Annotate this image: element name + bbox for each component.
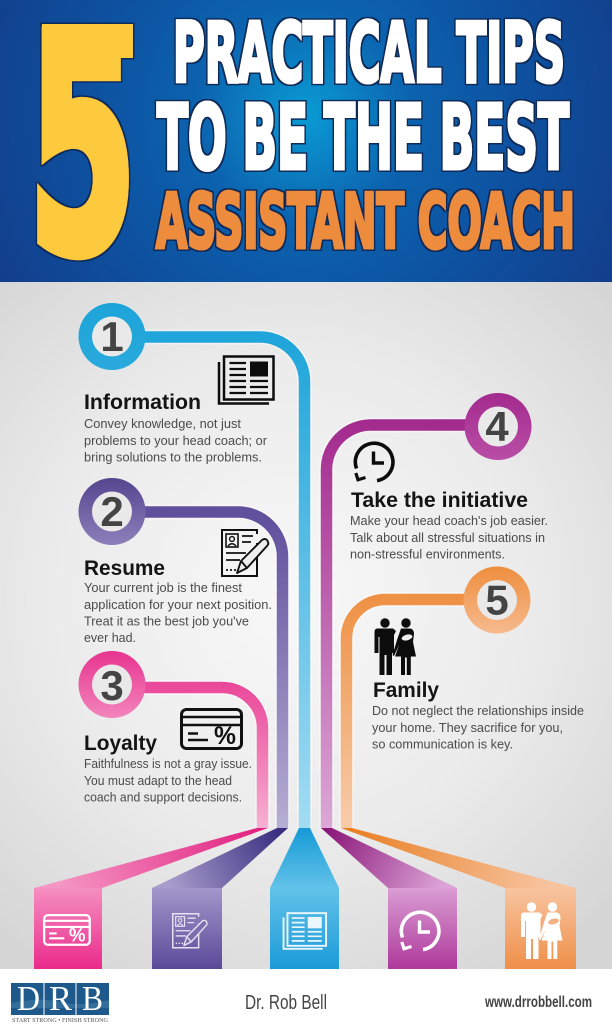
tile: newspaper icon <box>270 888 339 969</box>
panel: tip 1 information <box>78 303 304 828</box>
heading: family: Family <box>373 679 439 702</box>
number badge 1 <box>78 303 146 370</box>
footer logo DRB: R <box>49 979 73 1018</box>
text: family body <box>372 704 584 752</box>
text: information body <box>84 417 267 464</box>
tile: family icon <box>505 888 576 969</box>
footer background <box>0 969 612 1030</box>
text: loyalty body: Faithfulness is not a gray issue. <box>84 757 252 771</box>
tile: loyalty card icon <box>34 888 102 969</box>
text: resume body: application for your next position. <box>84 598 272 612</box>
heading: information: Information <box>84 391 201 414</box>
text: information body: bring solutions to the problems. <box>84 450 262 464</box>
number badge 2 <box>78 478 146 545</box>
number badge 2: 2 <box>100 488 124 535</box>
text: resume body <box>84 581 272 645</box>
tile: loyalty card icon: % <box>69 925 86 946</box>
number badge 3 <box>78 651 146 718</box>
funnel connectors <box>34 828 576 888</box>
panel: tip 4 take the initiative <box>326 393 548 828</box>
number badge 4: 4 <box>485 403 509 450</box>
text: take the initiative body <box>350 514 548 562</box>
icon: credit card: % <box>214 722 236 750</box>
number badge 3: 3 <box>100 662 124 709</box>
text: family body: Do not neglect the relationships inside <box>372 704 584 718</box>
footer logo DRB: START STRONG • FINISH STRONG <box>12 1017 108 1024</box>
tile: resume icon <box>152 888 222 969</box>
text: information body: problems to your head coach; or <box>84 434 267 448</box>
number badge 5 <box>464 566 530 634</box>
icon: newspaper <box>219 356 274 404</box>
number badge 4 <box>464 393 532 460</box>
number badge 1: 1 <box>100 313 124 360</box>
footer logo DRB: D <box>17 979 40 1018</box>
icon: clock <box>355 443 393 481</box>
text: resume body: ever had. <box>84 631 136 645</box>
text: family body: your home. They sacrifice for you, <box>372 721 563 735</box>
content background <box>0 282 612 969</box>
text: loyalty body: You must adapt to the head <box>84 774 232 788</box>
text: take the initiative body: Make your head coach's job easier. <box>350 514 548 528</box>
text: take the initiative body: non-stressful environments. <box>350 548 505 562</box>
text: loyalty body <box>84 757 252 804</box>
footer name: Dr. Rob Bell <box>245 992 327 1014</box>
icon: resume <box>222 530 268 576</box>
footer logo DRB <box>11 979 109 1024</box>
panel: tip 3 loyalty <box>78 651 262 828</box>
header banner <box>0 0 612 319</box>
panel: tip 2 resume <box>78 478 282 828</box>
text: family body: so communication is key. <box>372 738 513 752</box>
heading: take the initiative: Take the initiative <box>351 489 528 512</box>
number badge 5: 5 <box>485 576 509 624</box>
tile: clock icon <box>388 888 457 969</box>
heading: loyalty: Loyalty <box>84 732 157 755</box>
text: loyalty body: coach and support decisions. <box>84 790 242 804</box>
icon: family <box>374 618 416 675</box>
text: information body: Convey knowledge, not just <box>84 417 242 431</box>
heading: resume: Resume <box>84 557 165 580</box>
icon: credit card <box>182 710 242 750</box>
panel: tip 5 family <box>346 566 584 828</box>
text: take the initiative body: Talk about all stressful situations in <box>350 531 545 545</box>
text: resume body: Treat it as the best job you've <box>84 614 249 628</box>
big number 5 <box>29 0 136 319</box>
footer logo DRB: B <box>82 979 103 1018</box>
text: resume body: Your current job is the finest <box>84 581 243 595</box>
